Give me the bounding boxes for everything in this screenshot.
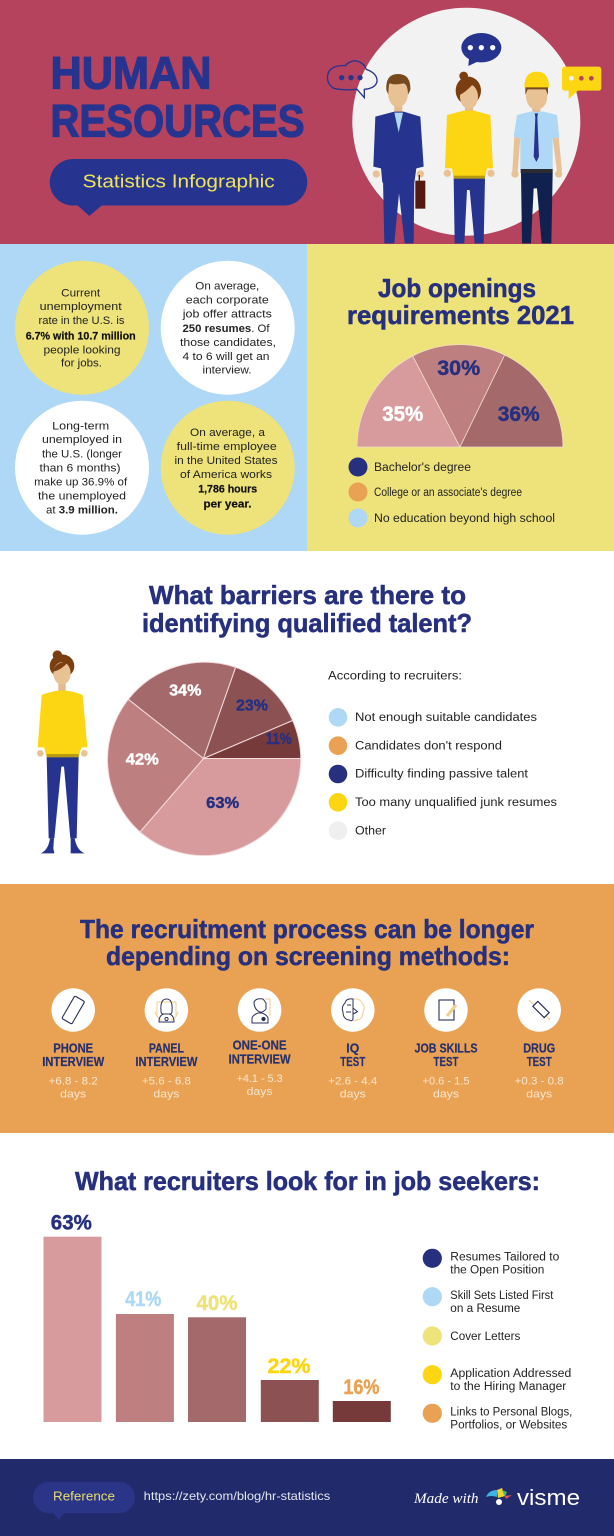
- stat: unemployment rate: unemployment: [40, 301, 122, 313]
- bar chart: 40%: [196, 1292, 238, 1315]
- reference pill: Reference: [53, 1488, 115, 1504]
- branding: made with visme: visme: [517, 1485, 580, 1510]
- stat: long-term unemployed: the U.S. (longer: [42, 448, 122, 460]
- chart: semicircle pie: 36%: [498, 402, 540, 426]
- branding: made with visme: Made with: [413, 1491, 478, 1507]
- chart: semicircle pie: 30%: [437, 356, 480, 380]
- legend: Links to Personal Blogs,: [450, 1406, 572, 1418]
- stat: unemployment rate: for jobs.: [61, 358, 102, 370]
- heading: depending on screening methods:: [106, 941, 510, 971]
- legend: Other: [355, 825, 386, 837]
- step: job skills test: +0.6 - 1.5: [422, 1075, 470, 1087]
- panel: barriers to talent: [0, 551, 614, 884]
- stat: hours worked: 1,786 hours: [198, 484, 257, 496]
- icon: visme logo: [486, 1488, 512, 1505]
- icon: one-one candidate: [252, 999, 270, 1023]
- worker: engineer in hard hat: [511, 72, 562, 243]
- stat: unemployment rate: [15, 261, 149, 395]
- speech bubble: yellow: [562, 67, 601, 99]
- bar chart: [44, 1211, 391, 1422]
- speech bubble: outlined: [327, 61, 377, 98]
- step: one-one interview: days: [247, 1086, 273, 1098]
- heading: identifying qualified talent?: [142, 608, 472, 638]
- step: panel interview: INTERVIEW: [135, 1055, 198, 1069]
- stat: resumes per job offer: [161, 261, 295, 395]
- heading: Job openings: [378, 273, 536, 303]
- stat: resumes per job offer: job offer attracts: [182, 308, 272, 320]
- step: IQ test: TEST: [340, 1055, 366, 1069]
- panel: header: [0, 0, 614, 244]
- panel: job openings requirements: [307, 244, 614, 551]
- heading: The recruitment process can be longer: [80, 914, 534, 944]
- step: panel interview: [135, 988, 198, 1100]
- step: panel interview: PANEL: [149, 1041, 184, 1055]
- heading: What recruiters look for in job seekers:: [75, 1166, 540, 1196]
- bar chart: 63%: [51, 1211, 92, 1234]
- icon: brain: [342, 999, 364, 1021]
- step: job skills test: TEST: [434, 1055, 459, 1069]
- step: IQ test: +2.6 - 4.4: [328, 1075, 377, 1087]
- legend: [348, 458, 555, 528]
- worker: woman in yellow: [444, 72, 495, 243]
- stat: hours worked: [161, 401, 295, 535]
- legend: [423, 1249, 572, 1431]
- stat: long-term unemployed: unemployed in: [42, 434, 122, 446]
- title: RESOURCES: [50, 96, 304, 146]
- step: phone interview: INTERVIEW: [42, 1055, 104, 1069]
- illustration: three workers: [327, 8, 601, 243]
- illustration: standing woman: [37, 650, 88, 853]
- heading: requirements 2021: [347, 300, 574, 330]
- step: IQ test: days: [340, 1088, 366, 1100]
- panel: what recruiters look for: [0, 1133, 614, 1459]
- stat: long-term unemployed: [15, 401, 149, 535]
- chart: barriers pie: [108, 662, 301, 856]
- legend: Cover Letters: [450, 1331, 521, 1343]
- speech bubble: navy: [461, 33, 501, 66]
- heading: [142, 580, 472, 638]
- step: one-one interview: [229, 988, 291, 1098]
- stat: unemployment rate: 6.7% with 10.7 million: [26, 330, 136, 342]
- stat: unemployment rate: rate in the U.S. is: [38, 315, 125, 327]
- reference url: https://zety.com/blog/hr-statistics: [144, 1489, 330, 1503]
- legend: on a Resume: [450, 1303, 520, 1315]
- stat: hours worked: of America works: [180, 469, 273, 481]
- panel: quick statistics: [0, 244, 307, 551]
- stat: hours worked: full-time employee: [177, 441, 277, 453]
- legend: Resumes Tailored to: [450, 1252, 559, 1264]
- stat: hours worked: in the United States: [174, 455, 278, 467]
- subtitle pill: Statistics Infographic: [83, 172, 275, 192]
- chart: barriers pie: 34%: [169, 682, 202, 700]
- step: IQ test: IQ: [346, 1041, 360, 1055]
- step: phone interview: +6.8 - 8.2: [49, 1075, 98, 1087]
- stat: resumes per job offer: 4 to 6 will get an: [182, 351, 270, 363]
- legend: Difficulty finding passive talent: [355, 769, 529, 781]
- step: IQ test: [328, 988, 377, 1100]
- panel: recruitment process: [0, 884, 614, 1133]
- step: one-one interview: INTERVIEW: [229, 1052, 291, 1066]
- chart: barriers pie: 23%: [236, 698, 268, 714]
- step: drug test: [515, 988, 564, 1100]
- icon: panel candidate: [155, 999, 178, 1022]
- step: one-one interview: +4.1 - 5.3: [237, 1073, 283, 1085]
- bar chart: 16%: [343, 1376, 380, 1399]
- step: phone interview: days: [60, 1088, 87, 1100]
- stat: hours worked: per year.: [204, 498, 252, 510]
- step: one-one interview: ONE-ONE: [233, 1038, 287, 1052]
- chart: barriers pie: 63%: [206, 795, 239, 812]
- stat: hours worked: On average, a: [190, 427, 266, 439]
- legend: Too many unqualified junk resumes: [355, 797, 557, 809]
- stat: long-term unemployed: than 6 months): [40, 462, 120, 474]
- step: drug test: +0.3 - 0.8: [515, 1075, 564, 1087]
- legend: Application Addressed: [450, 1368, 571, 1380]
- stat: unemployment rate: Current: [61, 287, 100, 299]
- stat: resumes per job offer: those candidates,: [180, 337, 276, 349]
- chart: barriers pie: 11%: [266, 731, 292, 748]
- reference pill: [33, 1482, 135, 1520]
- stat: resumes per job offer: each corporate: [186, 294, 269, 306]
- icon: phone: [62, 996, 85, 1024]
- step: job skills test: JOB SKILLS: [414, 1041, 478, 1055]
- stat: long-term unemployed: Long-term: [52, 420, 109, 432]
- legend: Portfolios, or Websites: [450, 1419, 568, 1431]
- icon: syringe: [529, 1000, 550, 1020]
- step: drug test: days: [526, 1088, 553, 1100]
- heading: [80, 914, 534, 971]
- icon: document and pencil: [439, 1000, 456, 1020]
- step: job skills test: days: [433, 1088, 460, 1100]
- step: phone interview: PHONE: [53, 1041, 93, 1055]
- legend: No education beyond high school: [374, 513, 555, 525]
- stat: resumes per job offer: 250 resumes. Of: [182, 323, 270, 335]
- stat: unemployment rate: people looking: [44, 344, 120, 356]
- legend: Skill Sets Listed First: [450, 1290, 554, 1302]
- chart: barriers pie: 42%: [126, 752, 159, 768]
- legend: the Open Position: [450, 1264, 544, 1276]
- step: job skills test: [414, 988, 478, 1100]
- step: panel interview: +5.6 - 6.8: [142, 1075, 191, 1087]
- legend: to the Hiring Manager: [450, 1381, 566, 1393]
- stat: long-term unemployed: make up 36.9% of: [34, 476, 128, 488]
- bar chart: 41%: [125, 1288, 162, 1311]
- stat: long-term unemployed: at 3.9 million.: [46, 504, 118, 516]
- legend: [328, 670, 557, 840]
- title: [50, 48, 304, 146]
- branding: made with visme: [413, 1485, 580, 1510]
- step: drug test: TEST: [527, 1055, 552, 1069]
- bar chart: 22%: [268, 1355, 311, 1378]
- legend: Candidates don't respond: [355, 740, 502, 752]
- heading: What barriers are there to: [149, 580, 466, 610]
- chart: semicircle pie: [357, 345, 563, 447]
- stat: resumes per job offer: On average,: [195, 281, 259, 293]
- stat: resumes per job offer: interview.: [202, 364, 252, 376]
- panel: footer: [0, 1459, 614, 1536]
- subtitle pill: [50, 159, 307, 216]
- title: HUMAN: [50, 48, 212, 98]
- legend: Bachelor's degree: [374, 462, 471, 474]
- step: panel interview: days: [153, 1088, 180, 1100]
- chart: semicircle pie: 35%: [382, 402, 423, 426]
- step: drug test: DRUG: [523, 1041, 555, 1055]
- legend: According to recruiters:: [328, 670, 462, 682]
- stat: long-term unemployed: the unemployed: [38, 490, 126, 502]
- legend: Not enough suitable candidates: [355, 712, 537, 724]
- step: phone interview: [42, 988, 104, 1100]
- heading: [347, 273, 574, 330]
- legend: College or an associate's degree: [374, 487, 522, 499]
- worker: man in suit: [373, 74, 425, 243]
